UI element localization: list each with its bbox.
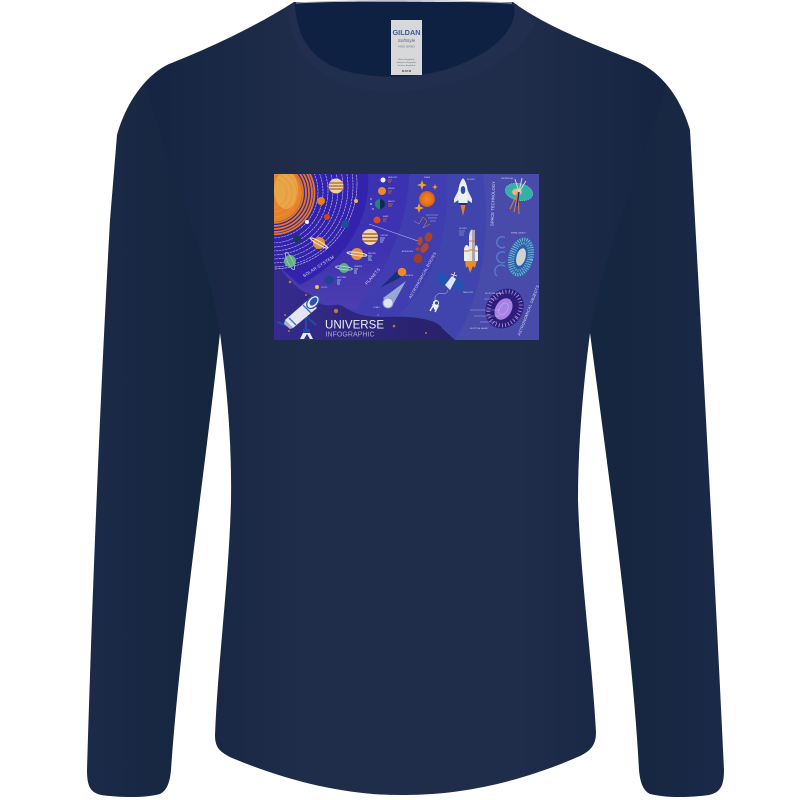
title: INFOGRAPHIC [326,332,374,338]
telescope [277,293,322,339]
lens [306,295,320,310]
divider line to asteroids [369,224,418,241]
rocket 2 [459,228,478,273]
meteor: METEOR [405,275,414,277]
planet info labels: PLUTO [321,287,328,289]
neck tag: Softstyle [398,38,416,43]
right sleeve [570,60,724,797]
stars and constellation: STARS [424,176,431,179]
planet info labels: VENUS [388,188,395,190]
neck tag: Made in Bangladesh [398,59,415,61]
planet info labels: MERCURY [388,177,398,179]
planet info labels [321,177,398,289]
asteroids: ASTEROIDS [402,250,414,253]
rocket 1 [454,178,476,216]
planet: ringed green [335,263,353,273]
planet info labels: URANUS [354,265,363,268]
collar [288,3,536,91]
planet: striped giant [362,229,378,245]
tube [285,299,317,328]
neck tag: 64000 SERIES [398,46,415,48]
neck tag: Hecho en Bangladesh [398,65,415,67]
rocket 2: ROCKET [459,228,468,230]
tripod [300,333,313,339]
planet: jupiter [328,178,344,194]
left sleeve [87,60,232,797]
background stars [284,281,427,334]
comet: COMET [373,307,381,309]
orbits [274,174,358,270]
handle [277,322,286,325]
planet info labels: JUPITER [380,235,389,237]
t-shirt [87,1,724,797]
title [325,320,384,338]
mount [306,316,316,331]
planet: ringed orange [347,248,367,260]
neck tag: GILDAN [392,30,420,37]
hill: lower left ground [274,261,455,340]
neck top edge [296,1,512,3]
section label: solar system: SOLAR SYSTEM [302,254,335,278]
gauges [495,237,505,276]
planets column [315,178,386,289]
astronaut [430,290,448,312]
satellite [435,272,474,294]
planet: uranus [284,251,296,271]
neck tag: M M M [402,69,412,73]
section label: planets: PLANETS [364,267,381,286]
planet info labels: EARTH [388,200,395,203]
elliptical galaxy: ELLIPTICAL GALAXY [485,292,504,295]
section label: space technology: SPACE TECHNOLOGY [490,181,496,226]
comet [373,281,406,309]
background bands [274,174,539,340]
satellite: SATELLITE [463,291,474,294]
supernova: SUPERNOVA [501,177,513,180]
shirt body [146,2,666,795]
stars and constellation [414,176,438,228]
spiral galaxy [507,232,535,278]
rocket 1: ROCKET [467,179,476,181]
planet: saturn [310,237,328,249]
section label: astronomical objects: ASTRONOMICAL OBJECTS [516,284,540,336]
printed infographic [274,174,539,340]
planet info labels: MARS [383,215,389,218]
planet info labels: NEPTUNE [337,277,347,279]
planet: earth [370,198,385,210]
neck tag [391,20,422,75]
elliptical galaxy: ELLIPTICAL GALAXY [470,327,489,330]
supernova [501,177,534,214]
solar system planets [284,178,358,271]
title: UNIVERSE [325,320,384,332]
spiral galaxy: SPIRAL GALAXY [511,232,526,234]
planet info labels: SATURN [368,252,376,255]
neck tag: Fabriqué au Bangladesh [397,62,416,64]
meteor [380,268,414,288]
elliptical galaxy [470,288,524,329]
asteroids [402,231,434,263]
section label: astronomical bodies: ASTRONOMICAL BODIES [408,251,438,299]
sun [274,174,316,236]
neck opening [295,2,515,77]
